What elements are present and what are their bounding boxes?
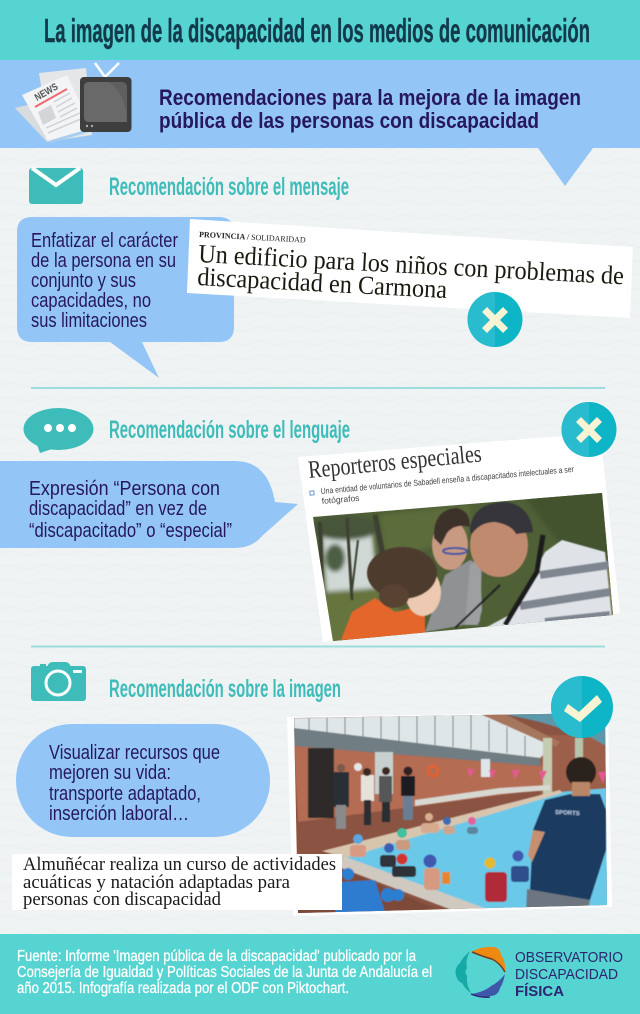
press clipping: Carmona headline: PROVINCIA / SOLIDARIDAD bbox=[199, 230, 306, 245]
heading: mensaje: Recomendación sobre el mensaje bbox=[109, 173, 349, 201]
heading: lenguaje: Recomendación sobre el lenguaje bbox=[109, 416, 350, 444]
logo wordmark: FÍSICA bbox=[515, 983, 565, 1000]
press clipping: Reporteros especiales: Reporteros especiales bbox=[307, 440, 483, 484]
bubble text: sus limitaciones bbox=[31, 310, 147, 332]
speech bubble: lenguaje bbox=[0, 461, 298, 548]
icon: envelope bbox=[29, 168, 83, 204]
icon: check bbox=[551, 676, 613, 738]
press clipping: Reporteros especiales bbox=[298, 433, 620, 650]
icon: cross 2 bbox=[561, 402, 616, 457]
source text bbox=[17, 948, 432, 997]
bubble text: transporte adaptado, bbox=[49, 783, 201, 805]
standing people bbox=[333, 772, 349, 807]
bubble text: de la persona en su bbox=[31, 250, 176, 272]
icon: camera bbox=[31, 662, 86, 701]
header band bbox=[0, 0, 640, 60]
photo: adapted swimming pool: SPORTS bbox=[555, 810, 580, 817]
photo: adapted swimming pool bbox=[287, 710, 612, 920]
photo: three people with camera bbox=[313, 493, 613, 641]
logo wordmark bbox=[515, 950, 623, 1000]
source text: Fuente: Informe 'Imagen pública de la discapacidad' publicado por la bbox=[17, 948, 416, 965]
bubble text: mejoren su vida: bbox=[49, 762, 171, 784]
footer band bbox=[0, 934, 640, 1014]
middle man bbox=[425, 560, 482, 632]
logo wordmark: DISCAPACIDAD bbox=[515, 967, 618, 983]
press clipping: Carmona headline bbox=[187, 219, 633, 318]
bubble text: “discapacitado” o “especial” bbox=[29, 520, 232, 542]
source text: año 2015. Infografía realizada por el ODF con Piktochart. bbox=[17, 980, 349, 997]
right man bbox=[485, 540, 612, 628]
logo: Observatorio Discapacidad Física bbox=[456, 947, 623, 1000]
instructor bbox=[530, 794, 606, 900]
bubble text: conjunto y sus bbox=[31, 270, 136, 292]
press clipping: Reporteros especiales: Una entidad de voluntarios de Sabadell enseña a discapacitados intelectuales a ser bbox=[320, 464, 574, 496]
bubble text: Expresión “Persona con bbox=[29, 478, 220, 500]
bubble text: Visualizar recursos que bbox=[49, 742, 220, 764]
caption: Almuñécar: personas con discapacidad bbox=[23, 890, 222, 910]
speech bubble: imagen bbox=[16, 724, 270, 837]
swimmers bbox=[350, 813, 529, 902]
press clipping: Carmona headline: discapacidad en Carmona bbox=[197, 262, 448, 304]
caption: Almuñécar: acuáticas y natación adaptadas para bbox=[23, 873, 290, 893]
source text: Consejería de Igualdad y Políticas Sociales de la Junta de Andalucía el bbox=[17, 964, 432, 981]
icon: chat bubble bbox=[24, 408, 94, 453]
woman in orange bbox=[341, 598, 425, 640]
logo wordmark: OBSERVATORIO bbox=[515, 950, 623, 966]
grey band bbox=[294, 728, 540, 766]
subtitle banner bbox=[0, 60, 640, 186]
subtitle text: Recomendaciones para la mejora de la imagen bbox=[159, 85, 581, 110]
bubble text bbox=[49, 742, 220, 825]
icon: cross 1 bbox=[468, 292, 522, 347]
brick wall bbox=[294, 746, 552, 822]
pool bbox=[343, 788, 610, 910]
speech bubble: mensaje bbox=[17, 217, 234, 378]
subtitle text bbox=[159, 85, 581, 133]
caption: Almuñécar bbox=[12, 854, 342, 910]
bubble text bbox=[29, 478, 232, 542]
icon: television bbox=[80, 63, 132, 132]
heading: imagen: Recomendación sobre la imagen bbox=[109, 675, 341, 703]
press clipping: Reporteros especiales: fotógrafos bbox=[321, 493, 360, 506]
bubble text bbox=[31, 230, 178, 332]
caption: Almuñécar: Almuñécar realiza un curso de actividades bbox=[23, 855, 336, 875]
bubble text: Enfatizar el carácter bbox=[31, 230, 178, 252]
bubble text: inserción laboral… bbox=[49, 803, 189, 825]
brick right and ceiling bbox=[540, 735, 610, 795]
bubble text: discapacidad” en vez de bbox=[29, 498, 207, 520]
icon: newspaper: NEWS bbox=[33, 81, 60, 104]
icon: newspaper bbox=[15, 68, 93, 143]
windows bbox=[294, 714, 552, 758]
foam blocks bbox=[342, 868, 354, 880]
subtitle text: pública de las personas con discapacidad bbox=[159, 108, 539, 133]
bubble text: capacidades, no bbox=[31, 290, 151, 312]
